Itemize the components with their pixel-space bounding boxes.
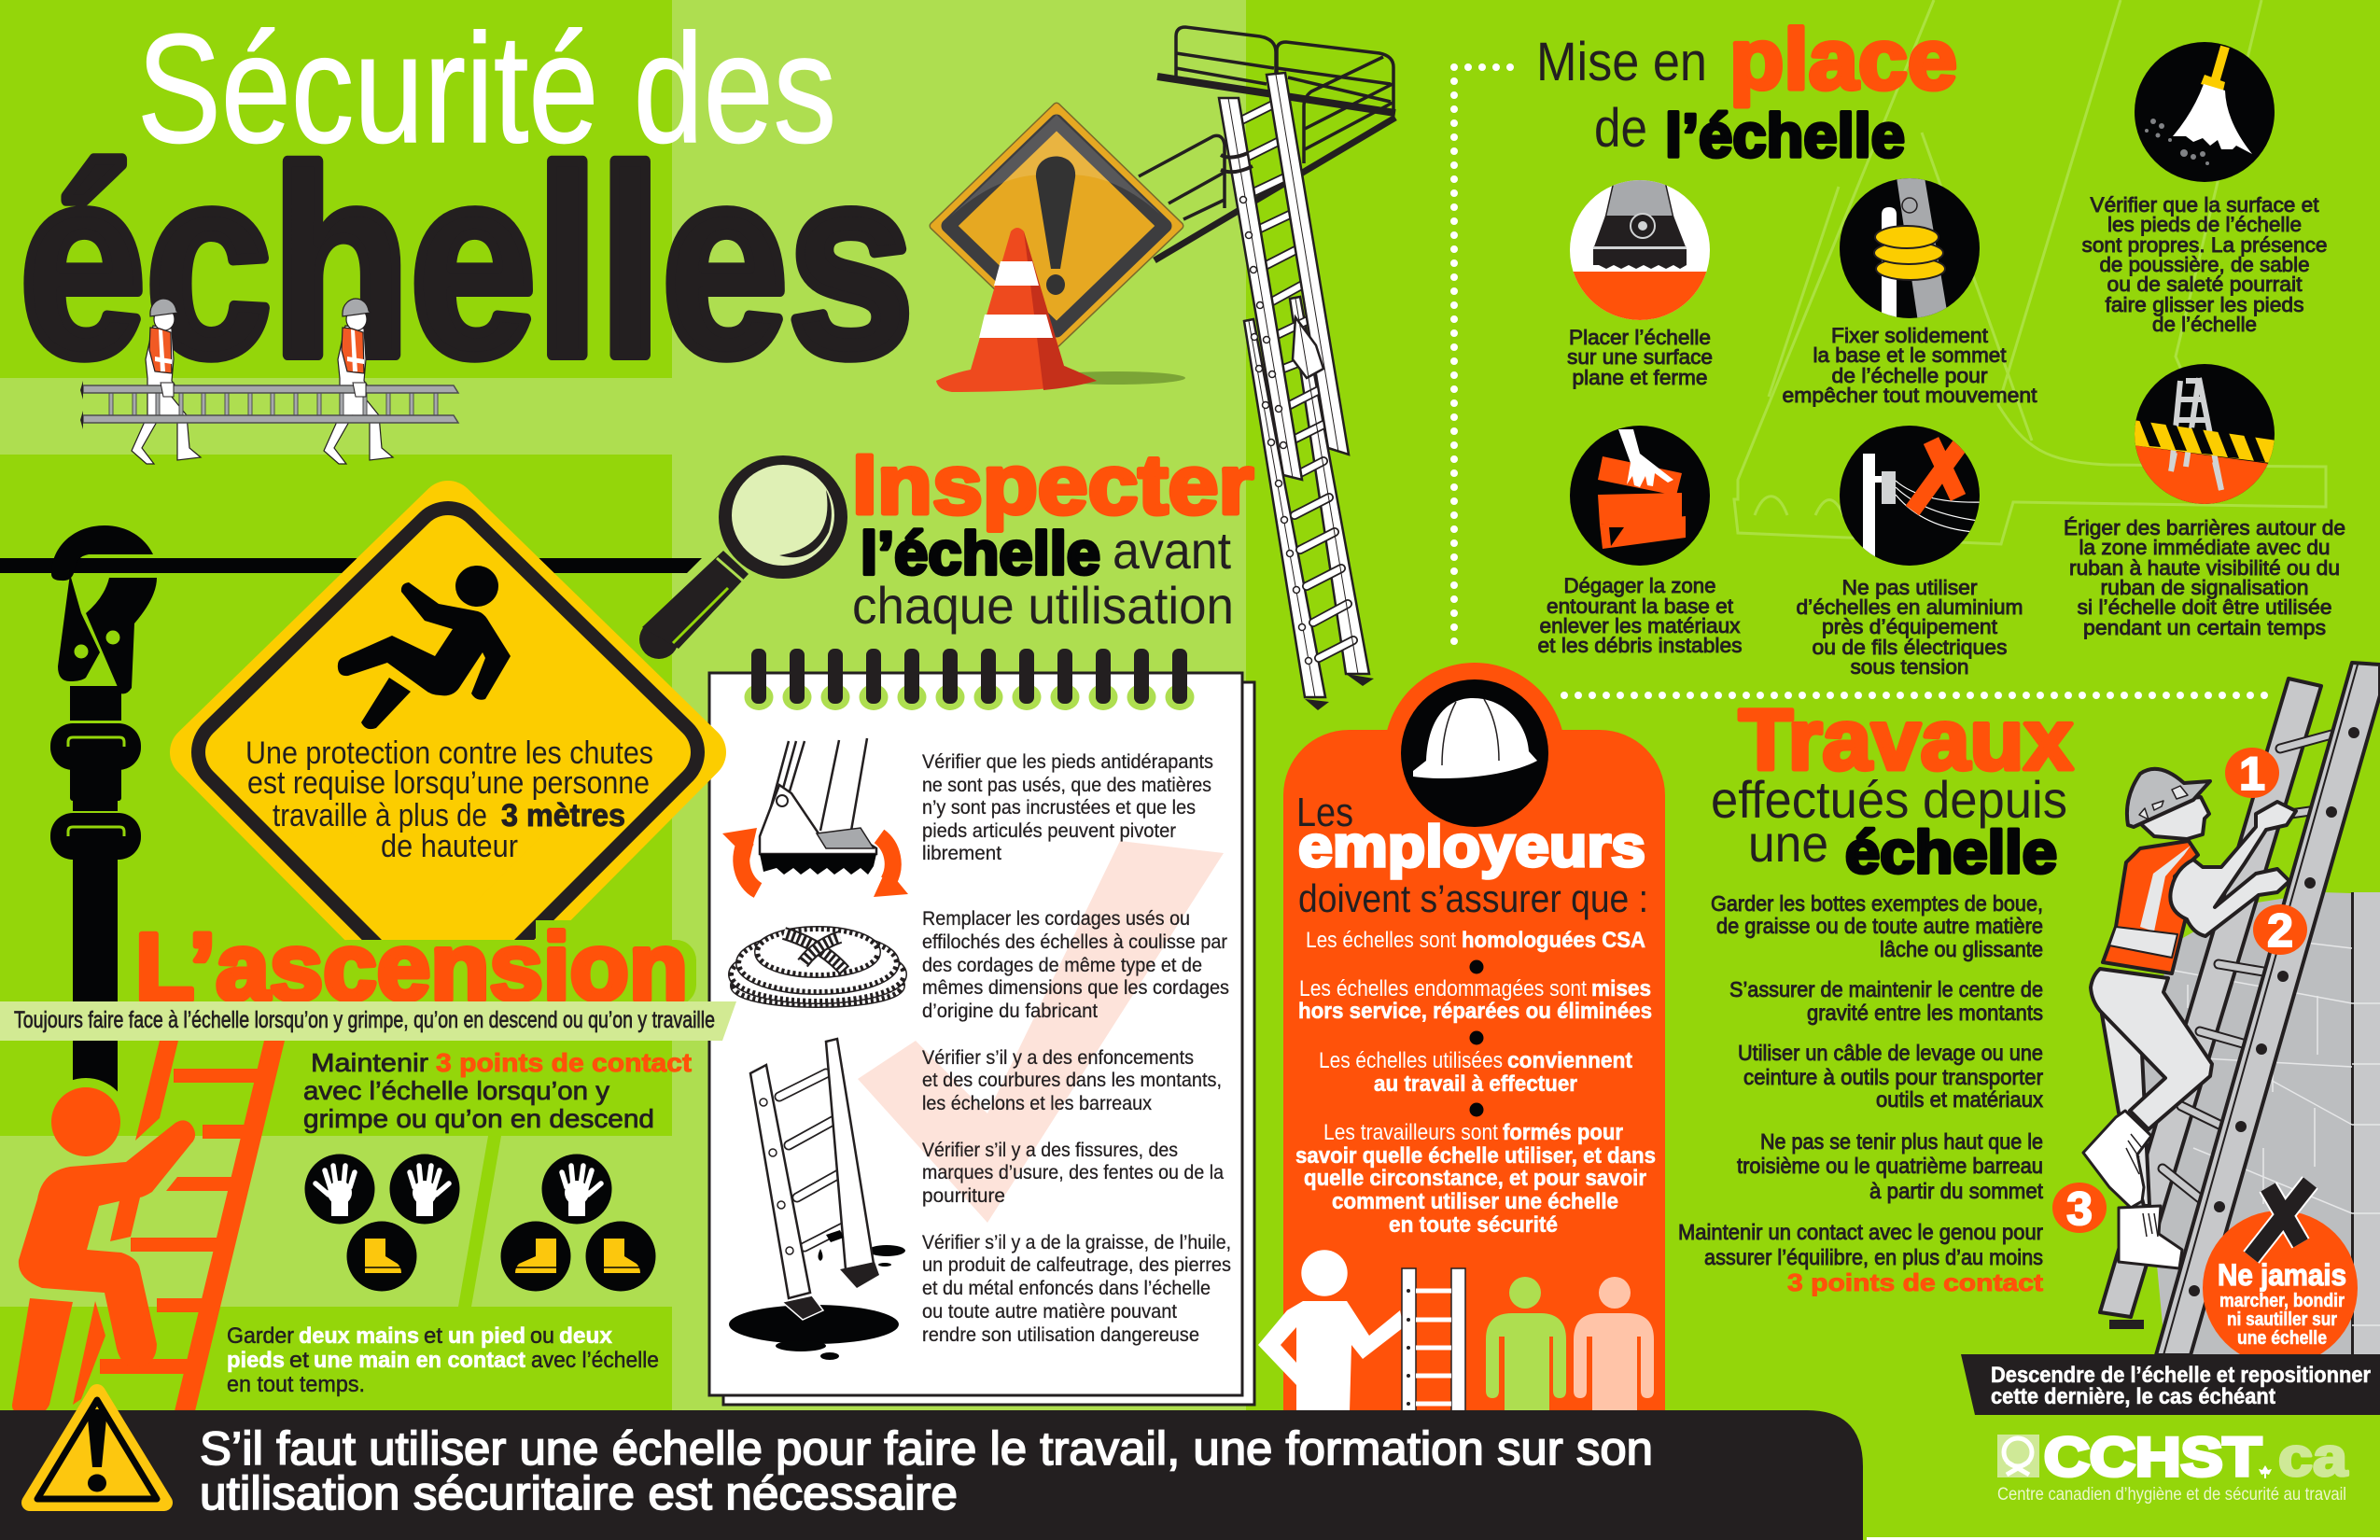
text: clean surface: ou de saleté pourrait [2107,273,2302,296]
text: clean surface: de l’échelle [2152,313,2257,336]
illustration: two workers carrying a ladder [80,299,458,464]
text: working rules: Utiliser un câble de levage ou une [1738,1041,2043,1065]
three points of contact text: 3 points de contact [436,1048,692,1077]
notebook text: mêmes dimensions que les cordages [922,977,1229,999]
text: barriers [2064,516,2345,639]
wall [2137,892,2380,1355]
front rail [2156,663,2380,1355]
text: place ladder: Placer l’échelle [1569,326,1711,349]
rungs [2163,735,2331,1198]
traffic cone [936,228,1185,392]
text: keep two hands and one foot: pieds [227,1348,285,1373]
text: aluminium warning: d’échelles en aluminium [1796,595,2023,619]
text: keep two hands and one foot: et [424,1323,442,1349]
employers list [1295,928,1656,1238]
text: clear the area: Dégager la zone [1564,574,1715,597]
text: barriers: ruban de signalisation [2100,576,2309,599]
text: barriers: la zone immédiate avec du [2079,536,2330,559]
employers list: Les échelles utilisées [1319,1048,1503,1073]
heading: Mise en place de l'échelle: place [1729,12,1957,107]
logo: CCHST.ca: ca [2278,1427,2348,1488]
illustration: worker climbing ladder against wall [2083,663,2380,1355]
notebook text: ou toute autre matière pouvant [922,1301,1177,1323]
notebook text: et des courbures dans les montants, [922,1070,1222,1091]
callout: never jump on a ladder: marcher, bondir [2219,1291,2345,1311]
sign text: Une protection contre les chutes [245,735,653,771]
notebook text: Vérifier s’il y a de la graisse, de l’huile, [922,1232,1231,1253]
notebook text [922,751,1231,1346]
text: clean surface: de poussière, de sable [2100,253,2309,276]
icons: hands and boots [304,1154,655,1292]
text: working rules: lâche ou glissante [1880,937,2043,961]
employers heading: employeurs [1298,815,1645,879]
notebook rings [745,649,1195,710]
icon: warning triangle [30,1393,164,1503]
notebook text: Remplacer les cordages usés ou [922,908,1190,930]
text: secure ladder: la base et le sommet [1813,343,2007,367]
illustration: platform and extension ladder [1139,27,1395,710]
number badges: 3 [2066,1183,2093,1235]
sign text: est requise lorsqu’une personne [247,765,650,801]
text: secure ladder: de l’échelle pour [1831,364,1988,387]
text: secure ladder: empêcher tout mouvement [1783,384,2037,407]
icon: coiled rope [734,931,902,1002]
bottom bar: training required [0,1410,1863,1540]
heading: Mise en place de l'échelle [1536,12,1957,170]
notebook text: Vérifier que les pieds antidérapants [922,751,1213,773]
employers list: Les échelles sont [1306,928,1456,953]
title: Sécurité des: Sécurité des [137,3,836,175]
text: working rules: à partir du sommet [1869,1179,2044,1203]
warning diamond sign [933,106,1180,343]
employers list: Les travailleurs sont [1323,1120,1498,1145]
three points of contact text [303,1048,692,1133]
three points of contact text: Maintenir [311,1048,428,1077]
employers list: conviennent [1507,1048,1632,1073]
heading: Mise en place de l'échelle: l’échelle [1665,101,1905,170]
dotted connector lines [1454,67,2273,695]
icon: ladder foot with pivot arrows [722,738,908,897]
worker body [2091,769,2296,1206]
heading: Inspecter l'échelle avant chaque utilisation: Inspecter [852,439,1253,532]
text: place ladder: plane et ferme [1572,366,1708,389]
icon: ladder in oil spill [729,1039,905,1360]
employers list: comment utiliser une échelle [1332,1189,1618,1214]
text: clear the area [1538,574,1742,657]
heading: Inspecter l'échelle avant chaque utilisation [852,439,1253,635]
heading: Travaux effectués depuis une échelle: une [1748,814,1828,873]
employers list: au travail à effectuer [1374,1071,1577,1097]
notebook text: n’y sont pas incrustées et que les [922,797,1196,819]
banner: always face the ladder [0,1001,736,1041]
text: working rules: Garder les bottes exemptes de boue, [1711,891,2043,916]
employers list: mises [1591,976,1651,1001]
text: working rules: gravité entre les montants [1807,1001,2043,1025]
heading: Inspecter l'échelle avant chaque utilisation: chaque utilisation [852,576,1234,635]
employers list: homologuées CSA [1462,928,1645,953]
text: keep two hands and one foot: deux [559,1323,613,1349]
employers heading [1296,790,1648,920]
bottom bar: training required: S’il faut utiliser une échelle pour faire le travail, une formation sur son [200,1422,1653,1475]
text: barriers: si l’échelle doit être utilisée [2078,595,2331,619]
sign text [245,735,653,864]
fall protection sign [198,509,698,1004]
text: aluminium warning [1796,576,2023,679]
icon: ladder tied with rope [1840,177,1980,322]
illustration: climbing person on orange ladder [12,1041,285,1417]
text: keep two hands and one foot [227,1323,659,1397]
text: secure ladder [1783,324,2037,407]
text: clear the area: enlever les matériaux [1540,614,1740,637]
notebook text: ne sont pas usés, que des matières [922,775,1211,796]
notebook text: librement [922,843,1001,864]
text: working rules: 3 points de contact [1787,1268,2043,1296]
callout: never jump on a ladder [2203,1183,2358,1365]
heading: Travaux effectués depuis une échelle [1711,693,2073,886]
heading: Mise en place de l'échelle: de [1594,98,1647,159]
notebook text: et du métal enfoncés dans l’échelle [922,1278,1211,1299]
text: clean surface: sont propres. La présence [2081,233,2328,257]
employers heading: doivent s’assurer que : [1298,876,1648,920]
icon: falling person [338,566,511,729]
bottom bar: training required: utilisation sécuritaire est nécessaire [200,1467,958,1519]
heading: Mise en place de l'échelle: Mise en [1536,32,1707,92]
employers list: savoir quelle échelle utiliser, et dans [1295,1143,1656,1169]
text: working rules: ceinture à outils pour transporter [1743,1065,2043,1089]
icon: magnifying glass [639,455,847,659]
callout: never jump on a ladder: une échelle [2237,1328,2327,1349]
three points of contact text: avec l’échelle lorsqu’on y [303,1076,609,1105]
icon: hard hat [1401,679,1548,827]
text: barriers: pendant un certain temps [2083,616,2326,639]
text: keep two hands and one foot: deux mains [299,1323,419,1349]
logo: CCHST.ca: CCHST [2044,1427,2261,1488]
text: aluminium warning: sous tension [1850,655,1969,679]
icon: supervisor, ladder and workers [1258,1250,1654,1412]
heading: L'ascension: L’ascension [135,914,688,1020]
text: keep two hands and one foot: une main en contact [314,1348,525,1373]
notebook text: Vérifier s’il y a des fissures, des [922,1140,1178,1161]
text: keep two hands and one foot: ou [530,1323,554,1349]
heading: Travaux effectués depuis une échelle: Travaux [1739,693,2073,788]
notebook text: marques d’usure, des fentes ou de la [922,1162,1224,1183]
logo: CCHST.ca [1997,1427,2348,1505]
text: working rules: Ne pas se tenir plus haut que le [1760,1129,2043,1154]
icon: stepladder behind barrier tape [2133,364,2277,509]
notebook text: Vérifier s’il y a des enfoncements [922,1047,1194,1069]
text: working rules: S’assurer de maintenir le centre de [1729,977,2043,1001]
title: échelles: échelles [20,113,914,412]
text: clean surface: faire glisser les pieds [2106,293,2303,316]
employers heading: Les [1296,790,1353,835]
sign text: de hauteur [381,829,518,864]
employers list: quelle circonstance, et pour savoir [1304,1166,1646,1191]
notebook text: les échelons et les barreaux [922,1093,1152,1114]
text: clear the area: entourant la base et [1547,595,1733,618]
text: aluminium warning: Ne pas utiliser [1842,576,1977,599]
icon: clearing bricks [1570,426,1710,566]
icon: ladder foot on firm surface [1570,180,1710,320]
text: working rules [1678,891,2044,1296]
callout: never jump on a ladder: Ne jamais [2218,1258,2346,1292]
notebook text: pourriture [922,1185,1005,1207]
icon: broom [2135,42,2275,182]
employers list: Les échelles endommagées sont [1299,976,1587,1001]
text: keep two hands and one foot: en tout temps. [227,1372,365,1397]
text: barriers: Ériger des barrières autour de [2064,516,2345,539]
text: keep two hands and one foot: et [289,1348,309,1373]
notebook text: un produit de calfeutrage, des pierres [922,1254,1231,1276]
text: aluminium warning: près d’équipement [1822,615,1997,638]
text: working rules: outils et matériaux [1876,1087,2043,1112]
banner: always face the ladder: Toujours faire face à l’échelle lorsqu’on y grimpe, qu’on en descend ou qu’on y travaille [14,1007,715,1033]
sign text: travaille à plus de [273,798,487,833]
notebook text: rendre son utilisation dangereuse [922,1324,1199,1346]
three points of contact text: grimpe ou qu’on en descend [303,1104,654,1133]
text: working rules: assurer l’équilibre, en plus d’au moins [1704,1245,2043,1269]
heading: Travaux effectués depuis une échelle: effectués depuis [1711,770,2067,829]
callout: reposition ladder [1961,1354,2380,1415]
notebook text: d’origine du fabricant [922,1001,1098,1022]
text: aluminium warning: ou de fils électriques [1813,636,2007,659]
notebook text: pieds articulés peuvent pivoter [922,820,1176,842]
heading: Inspecter l'échelle avant chaque utilisation: avant [1113,521,1231,580]
employers list: hors service, réparées ou éliminées [1298,999,1652,1024]
number badges: 2 [2267,904,2293,957]
heading: Travaux effectués depuis une échelle: échelle [1845,819,2057,886]
panel: inspection notebook [709,649,1254,1405]
text: clear the area: et les débris instables [1538,634,1742,657]
text: working rules: troisième ou le quatrième barreau [1737,1154,2043,1178]
text: working rules: de graisse ou de toute autre matière [1716,914,2043,938]
callout: never jump on a ladder: ni sautiller sur [2227,1309,2337,1330]
callout: reposition ladder: cette dernière, le cas échéant [1991,1384,2275,1409]
heading: Inspecter l'échelle avant chaque utilisation: l’échelle [861,519,1100,587]
panel: employers [1258,663,1665,1495]
number badges [2052,748,2307,1235]
employers list: formés pour [1503,1120,1623,1145]
text: clean surface: Vérifier que la surface et [2091,193,2318,217]
text: place ladder: sur une surface [1567,345,1713,369]
text: working rules: Maintenir un contact avec le genou pour [1678,1220,2043,1244]
text: keep two hands and one foot: Garder [227,1323,294,1349]
text: barriers: ruban à haute visibilité ou du [2069,556,2340,580]
sign text: 3 mètres [501,798,625,833]
text: clean surface: les pieds de l’échelle [2107,213,2302,236]
checkmark watermark [858,841,1224,1223]
text: keep two hands and one foot: avec l’échelle [531,1348,659,1373]
notebook text: effilochés des échelles à coulisse par [922,931,1227,953]
boots [2083,1111,2182,1268]
text: place ladder [1567,326,1713,389]
text: clean surface [2081,193,2328,336]
lanyard and hook [0,525,702,1103]
number badges: 1 [2239,748,2265,800]
notebook text: des cordages de même type et de [922,955,1202,976]
icon: power line with X [1840,426,1983,566]
rear rail [2100,679,2321,1317]
text: secure ladder: Fixer solidement [1831,324,1988,347]
text: keep two hands and one foot: un pied [448,1323,525,1349]
employers list: en toute sécurité [1389,1212,1558,1238]
